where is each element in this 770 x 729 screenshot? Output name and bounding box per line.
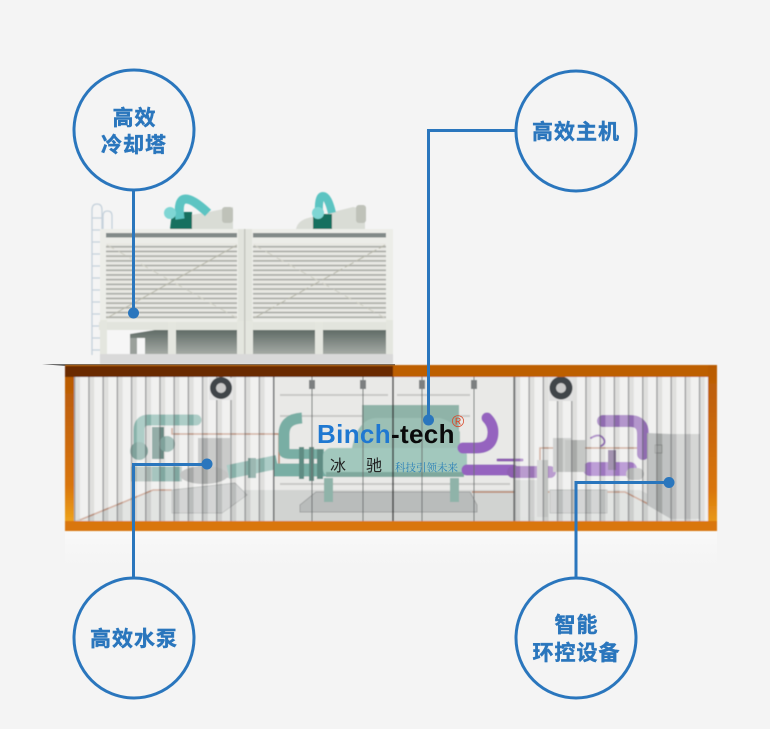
icon: left teal pipe and fan motor [164, 199, 233, 229]
slogan: 科技引领未来 [395, 461, 458, 474]
tower support frame [99, 229, 393, 355]
corrugated side panel right [514, 377, 708, 521]
icon: ladder [92, 204, 112, 355]
tower body [100, 229, 393, 324]
icon: centre-left teal pipes [274, 418, 328, 481]
container [65, 365, 717, 531]
tower base plate [100, 354, 393, 364]
glass door dividers [274, 372, 514, 523]
icon: control cabinet [647, 433, 700, 519]
callout: high efficiency pump [74, 578, 194, 698]
container frame [65, 365, 717, 531]
logo chinese name: 冰 [330, 457, 346, 475]
icon: right pump and tank [515, 438, 585, 517]
callout: high efficiency pump: 高效水泵 [90, 627, 178, 651]
connector: smart control [576, 477, 674, 577]
equipment skids [172, 483, 607, 513]
callout: high efficiency cooling tower [74, 70, 194, 190]
callout: high efficiency cooling tower: 高效 [112, 106, 156, 130]
roof line [42, 364, 395, 366]
panel: left louvers [106, 233, 237, 319]
panel: right louvers [253, 233, 386, 319]
icon: left teal pipework and pump [130, 420, 277, 484]
callout: high efficiency chiller [516, 71, 636, 191]
icon: right fan [549, 376, 573, 401]
logo chinese name 2: 驰 [366, 457, 382, 475]
reflection [65, 531, 717, 579]
container interior [74, 377, 708, 521]
callout: high efficiency cooling tower: 冷却塔 [101, 134, 167, 157]
cooling tower [92, 196, 393, 364]
callout: smart environment control equipment [516, 578, 636, 698]
icon: left fan [209, 377, 233, 400]
callout: high efficiency chiller: 高效主机 [532, 120, 620, 144]
grey floor [74, 490, 700, 521]
corrugated side panel left [74, 377, 274, 521]
connector: cooling tower [128, 190, 139, 318]
icon: right purple pipework [463, 418, 643, 474]
logo [317, 412, 465, 475]
icon: right teal pipe and fan motor [296, 196, 366, 229]
red-brown floor pipes [80, 428, 650, 520]
connector: pump [134, 458, 212, 577]
registered mark: ® [452, 412, 465, 431]
icon: chiller main unit [323, 405, 467, 502]
connector: chiller [423, 130, 515, 426]
callout: smart environment control equipment: 环控设备 [532, 642, 620, 665]
logo wordmark: Binch-tech [317, 419, 455, 449]
callout: smart environment control equipment: 智能 [554, 614, 598, 637]
rear wall bands [280, 395, 510, 484]
